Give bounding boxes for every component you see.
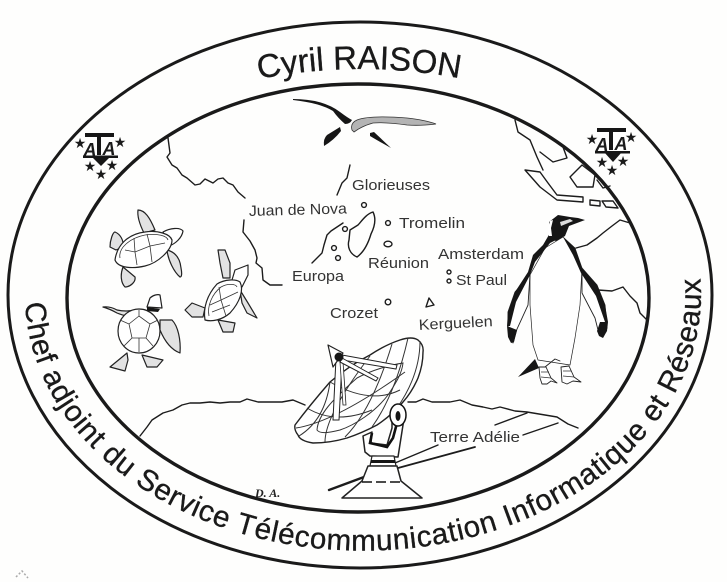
bird bbox=[293, 99, 436, 148]
turtle: bottom left bbox=[103, 295, 180, 371]
emblem: left TAAF: A bbox=[82, 140, 96, 160]
Madagascar and Mozambique Channel islands bbox=[332, 203, 375, 260]
turtle: right bbox=[185, 250, 257, 332]
label: Juan de Nova: Juan de Nova bbox=[249, 200, 348, 220]
emblem: right TAAF: ★ bbox=[625, 130, 637, 146]
emblem: left TAAF bbox=[74, 133, 126, 183]
signature: D. A. bbox=[254, 486, 280, 500]
coast: Africa bbox=[167, 138, 350, 285]
coast: Antarctica bbox=[140, 399, 578, 436]
paper speck bbox=[16, 571, 28, 578]
dish mount bbox=[342, 404, 422, 498]
emblem: left TAAF: ★ bbox=[84, 159, 96, 175]
penguin bbox=[507, 215, 608, 384]
label: Crozet: Crozet bbox=[330, 305, 379, 322]
satellite dish bbox=[295, 338, 423, 443]
label: Amsterdam: Amsterdam bbox=[438, 246, 524, 263]
label: Tromelin: Tromelin bbox=[399, 215, 465, 232]
title: Cyril RAISON bbox=[258, 46, 461, 82]
emblem: right TAAF: ★ bbox=[586, 132, 598, 148]
emblem: right TAAF: A bbox=[594, 135, 608, 155]
pointer lines: Terre Adélie bbox=[329, 413, 558, 490]
label: St Paul: St Paul bbox=[456, 272, 507, 289]
emblem: right TAAF: ★ bbox=[606, 163, 618, 179]
label: Kerguelen: Kerguelen bbox=[418, 313, 493, 334]
coast: Indonesia and Australia bbox=[515, 120, 647, 320]
emblem: right TAAF bbox=[586, 128, 637, 179]
inner ellipse bbox=[67, 84, 649, 512]
emblem: right TAAF: ★ bbox=[596, 155, 608, 171]
emblem: right TAAF: A bbox=[614, 134, 628, 154]
label: Terre Adélie: Terre Adélie bbox=[430, 429, 520, 446]
label: Réunion: Réunion bbox=[368, 255, 429, 272]
curved subtitle: Chef adjoint du Service Télécommunication Informatique et Réseaux bbox=[26, 278, 702, 551]
turtle: top bbox=[110, 210, 183, 287]
label: Europa: Europa bbox=[292, 268, 345, 285]
emblem: left TAAF: ★ bbox=[106, 158, 118, 174]
emblem: right TAAF: ★ bbox=[617, 154, 629, 170]
emblem: left TAAF: A bbox=[102, 139, 116, 159]
emblem: left TAAF: ★ bbox=[95, 167, 107, 183]
emblem: left TAAF: ★ bbox=[74, 136, 86, 152]
islands: Indian Ocean bbox=[384, 221, 451, 307]
label: Glorieuses: Glorieuses bbox=[352, 177, 430, 194]
emblem: left TAAF: ★ bbox=[114, 135, 126, 151]
